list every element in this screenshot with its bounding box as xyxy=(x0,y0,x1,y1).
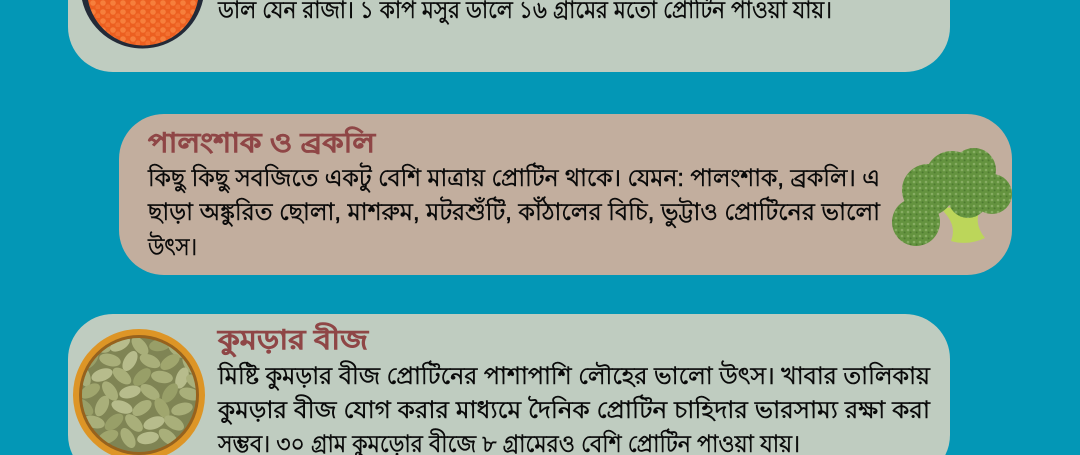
heading: pumpkin seeds: কুমড়ার বীজ xyxy=(217,322,369,357)
icon: broccoli xyxy=(892,148,1012,246)
panel: lentils xyxy=(68,0,950,72)
spinach and broccoli body text xyxy=(147,163,881,261)
pumpkin seeds body text: মিষ্টি কুমড়ার বীজ প্রোটিনের পাশাপাশি লৌহের ভালো উৎস। খাবার তালিকায় xyxy=(217,361,931,390)
spinach and broccoli body text: কিছু কিছু সবজিতে একটু বেশি মাত্রায় প্রোটিন থাকে। যেমন: পালংশাক, ব্রকলি। এ xyxy=(147,163,880,192)
icon: bowl of pumpkin seeds xyxy=(72,329,209,455)
panel: spinach and broccoli xyxy=(119,114,1012,275)
spinach and broccoli body text: উৎস। xyxy=(147,232,197,261)
pumpkin seeds body text xyxy=(217,361,931,455)
spinach and broccoli body text: ছাড়া অঙ্কুরিত ছোলা, মাশরুম, মটরশুঁটি, কাঁঠালের বিচি, ভুট্টাও প্রোটিনের ভালো xyxy=(147,197,881,227)
icon: bowl of red lentils xyxy=(82,0,203,48)
panel: pumpkin seeds xyxy=(68,314,950,455)
pumpkin seeds body text: কুমড়ার বীজ যোগ করার মাধ্যমে দৈনিক প্রোটিন চাহিদার ভারসাম্য রক্ষা করা xyxy=(217,395,931,424)
heading: spinach and broccoli: পালংশাক ও ব্রকলি xyxy=(148,126,376,158)
